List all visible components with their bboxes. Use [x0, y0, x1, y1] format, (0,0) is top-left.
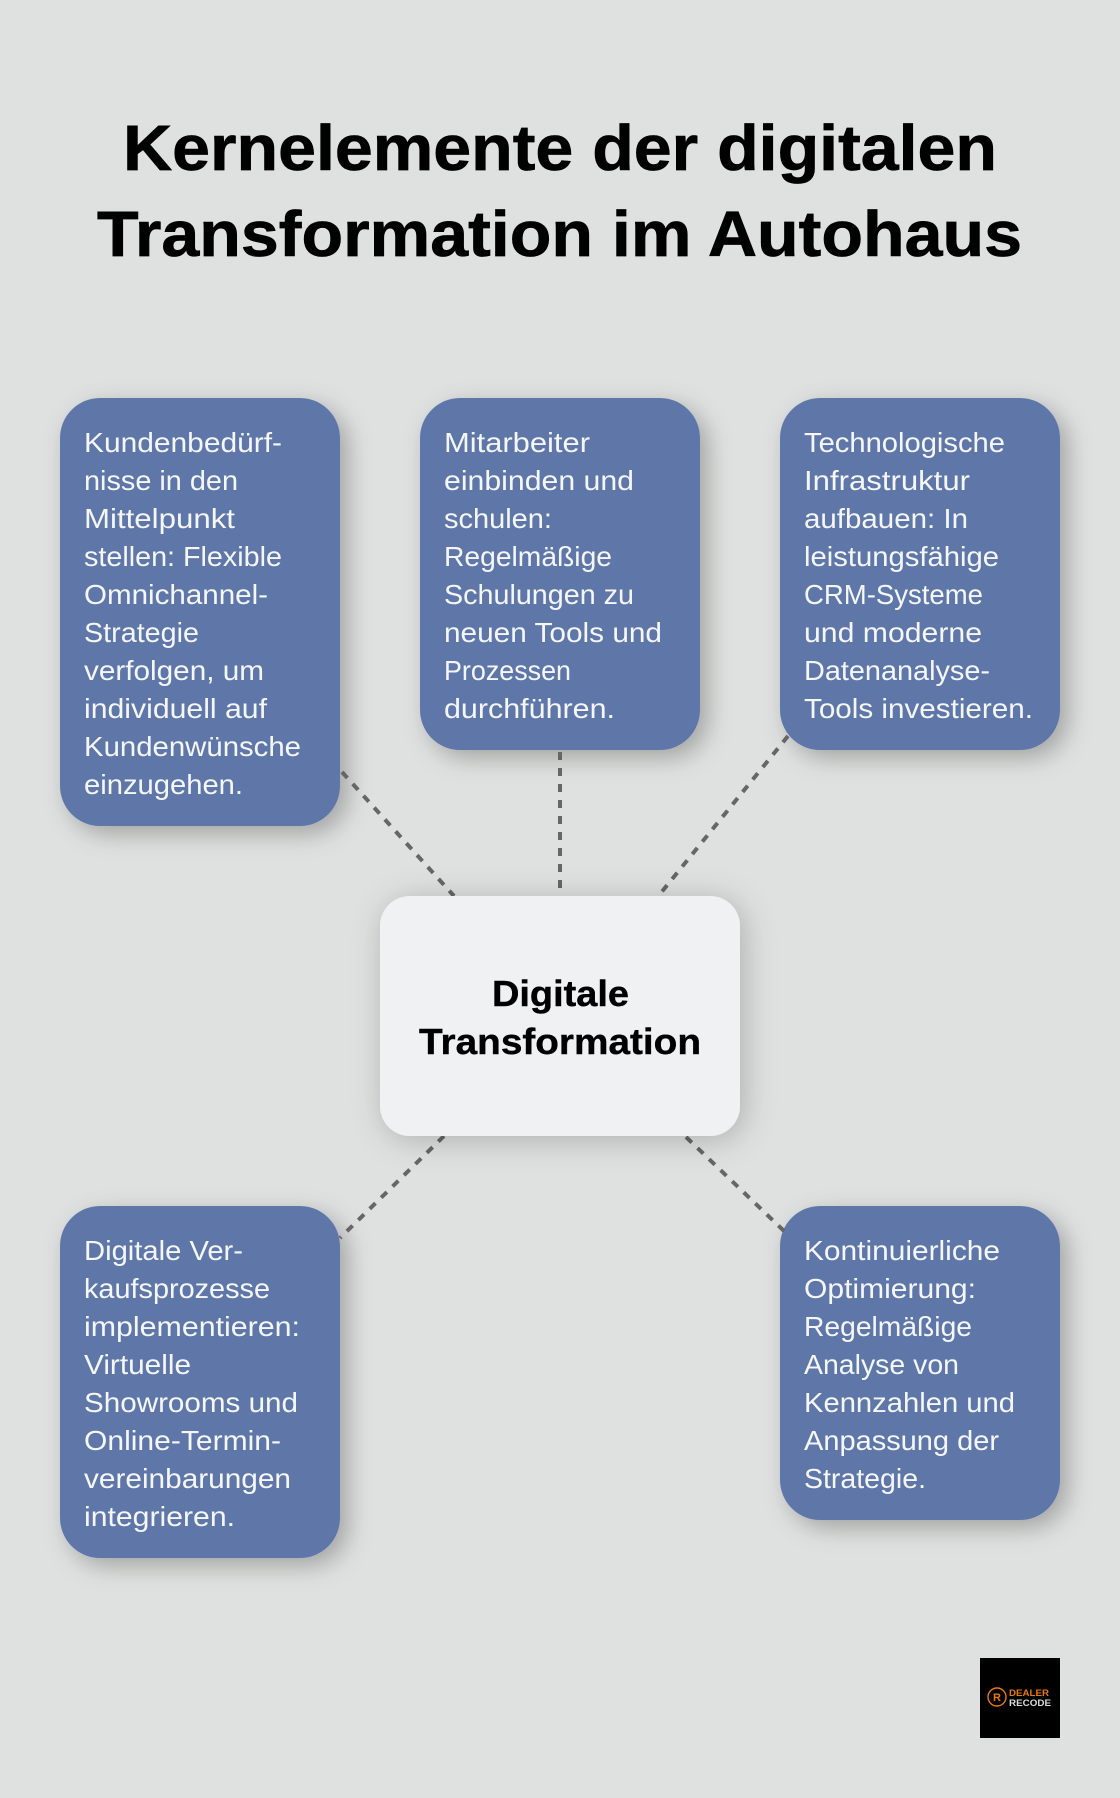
panel: Digitale Verkaufsprozesse: Showrooms und — [84, 1387, 298, 1418]
panel: Technologische Infrastruktur — [780, 398, 1060, 750]
panel: Digitale Verkaufsprozesse: Virtuelle — [84, 1349, 191, 1380]
panel: Mitarbeiter: durchführen. — [444, 693, 615, 724]
panel: Technologische Infrastruktur: Tools investieren. — [804, 693, 1033, 724]
panel: Technologische Infrastruktur: aufbauen: In — [804, 503, 968, 534]
panel: Mitarbeiter: neuen Tools und — [444, 617, 662, 648]
panel: Kontinuierliche Optimierung: Kennzahlen und — [804, 1387, 1015, 1418]
panel: Digitale Verkaufsprozesse: vereinbarungen — [84, 1463, 291, 1494]
title — [97, 112, 1022, 270]
panel: Kontinuierliche Optimierung: Strategie. — [804, 1463, 926, 1494]
panel: Kundenbedürfnisse: stellen: Flexible — [84, 541, 282, 572]
panel: center node: Transformation — [419, 1021, 701, 1062]
panel: Digitale Verkaufsprozesse: Online-Termin- — [84, 1425, 281, 1456]
panel: Digitale Verkaufsprozesse: Digitale Ver- — [84, 1235, 243, 1266]
panel: Mitarbeiter: einbinden und — [444, 465, 634, 496]
panel: Mitarbeiter — [420, 398, 700, 750]
panel: Digitale Verkaufsprozesse: kaufsprozesse — [84, 1273, 270, 1304]
panel: Mitarbeiter: Mitarbeiter — [444, 427, 590, 458]
panel: Kundenbedürfnisse: verfolgen, um — [84, 655, 264, 686]
panel: Kundenbedürfnisse: Omnichannel- — [84, 579, 268, 610]
panel: center node — [380, 896, 740, 1136]
logo: Dealer Recode: RECODE — [1009, 1698, 1051, 1708]
panel: Technologische Infrastruktur: Infrastruktur — [804, 465, 970, 496]
panel: Mitarbeiter: schulen: — [444, 503, 552, 534]
title: Transformation im Autohaus — [97, 198, 1022, 270]
panel: Technologische Infrastruktur: leistungsfähige — [804, 541, 999, 572]
panel: Kundenbedürfnisse: einzugehen. — [84, 769, 243, 800]
panel: Kontinuierliche Optimierung: Kontinuierliche — [804, 1235, 1000, 1266]
panel: Kundenbedürfnisse — [60, 398, 340, 826]
panel: Technologische Infrastruktur: CRM-Systeme — [804, 579, 983, 610]
panel: Technologische Infrastruktur: Datenanalyse- — [804, 655, 990, 686]
panel: Kontinuierliche Optimierung: Optimierung: — [804, 1273, 976, 1304]
panel: Kundenbedürfnisse: individuell auf — [84, 693, 267, 724]
panel: Kundenbedürfnisse: Strategie — [84, 617, 199, 648]
logo: Dealer Recode: DEALER — [1009, 1688, 1050, 1698]
panel: center node: Digitale — [492, 973, 629, 1014]
connectors: dashed lines — [340, 736, 788, 1238]
panel: Mitarbeiter: Regelmäßige — [444, 541, 612, 572]
panel: Kundenbedürfnisse: Kundenwünsche — [84, 731, 301, 762]
panel: Technologische Infrastruktur: und moderne — [804, 617, 982, 648]
panel: Technologische Infrastruktur: Technologische — [804, 427, 1005, 458]
title: Kernelemente der digitalen — [123, 112, 997, 184]
panel: Kontinuierliche Optimierung: Anpassung der — [804, 1425, 999, 1456]
panel: Digitale Verkaufsprozesse: implementieren: — [84, 1311, 300, 1342]
panel: Kontinuierliche Optimierung — [780, 1206, 1060, 1520]
panel: Digitale Verkaufsprozesse: integrieren. — [84, 1501, 235, 1532]
panel: Kundenbedürfnisse: Kundenbedürf- — [84, 427, 282, 458]
panel: Digitale Verkaufsprozesse — [60, 1206, 340, 1558]
logo: Dealer Recode: R — [993, 1692, 1001, 1704]
panel: Mitarbeiter: Prozessen — [444, 655, 571, 686]
panel: Kontinuierliche Optimierung: Analyse von — [804, 1349, 959, 1380]
panel: Kontinuierliche Optimierung: Regelmäßige — [804, 1311, 972, 1342]
logo: Dealer Recode — [980, 1658, 1060, 1738]
panel: Kundenbedürfnisse: Mittelpunkt — [84, 503, 235, 534]
panel: Kundenbedürfnisse: nisse in den — [84, 465, 238, 496]
panel: Mitarbeiter: Schulungen zu — [444, 579, 634, 610]
